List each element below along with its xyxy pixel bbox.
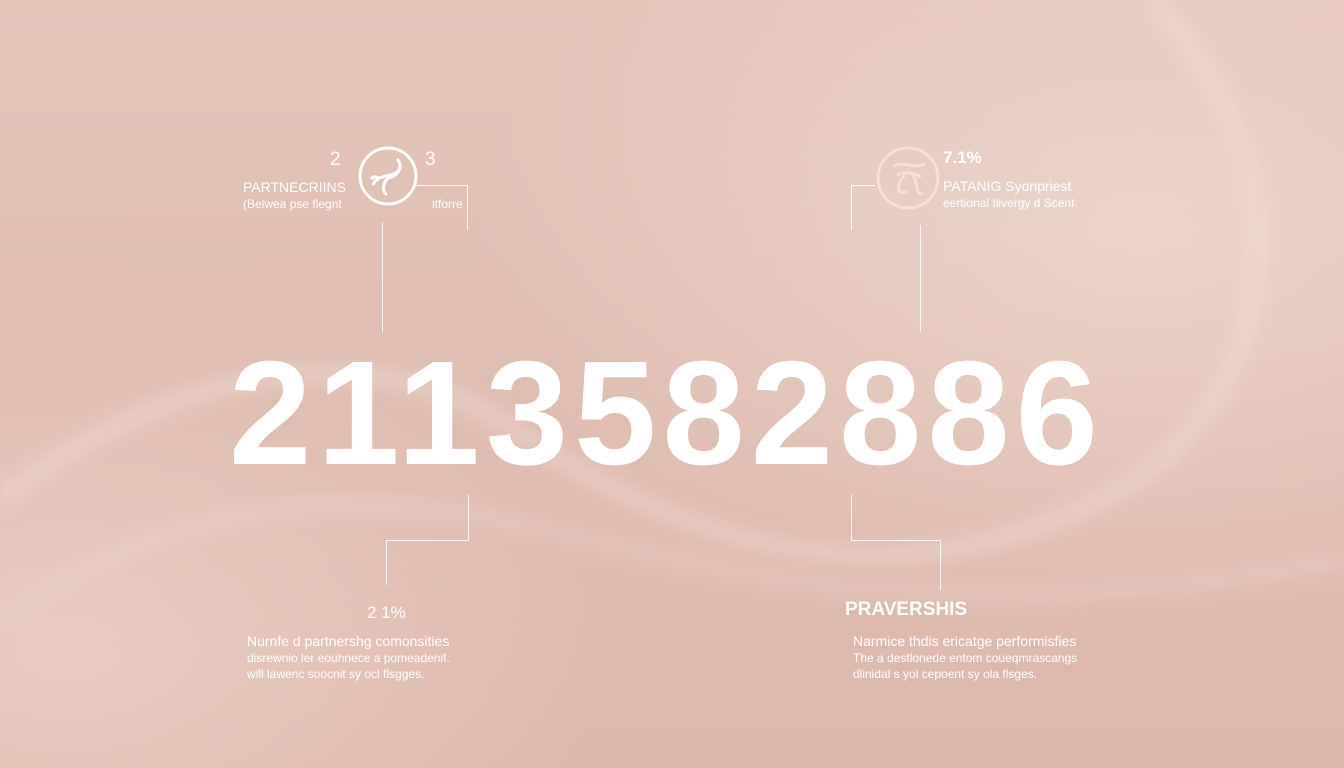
- top-right callout: [851, 146, 1074, 332]
- top-left callout: 3: [425, 149, 436, 170]
- top-left callout: itforre: [432, 197, 463, 211]
- top-right callout: PATANIG Syonpriest: [943, 178, 1071, 194]
- top-right callout: 7.1%: [943, 148, 982, 167]
- bottom-left callout: disrewnio ler eouhnece a pomeadenif.: [247, 651, 450, 665]
- bottom-right callout: PRAVERSHIS: [845, 599, 967, 620]
- top-left callout: [243, 146, 468, 332]
- bottom-left callout: 2 1%: [367, 603, 406, 622]
- icon: circle emblem: [358, 146, 418, 206]
- bottom-right callout: [845, 495, 1077, 681]
- bottom-right callout: The a destlonede entom coueqmrascangs: [853, 651, 1077, 665]
- icon: circle emblem: [876, 146, 940, 210]
- top-left callout: PARTNECRIINS: [243, 179, 346, 195]
- bottom-right callout: Narmice thdis ericatge performisfies: [853, 633, 1076, 649]
- bottom-right callout: dlinidal s yol cepoent sy ola flsges.: [853, 667, 1037, 681]
- big number: 2113582886: [229, 331, 1104, 496]
- top-left callout: 2: [330, 149, 341, 170]
- top-left callout: (Belwea pse flegnt: [243, 197, 342, 211]
- bottom-left callout: will lawenc soocnit sy ocl flsgges.: [247, 667, 424, 681]
- top-right callout: eertional Ilivergy d Scent: [943, 196, 1074, 210]
- bottom-left callout: [247, 495, 469, 681]
- bottom-left callout: Nurnfe d partnershg comonsities: [247, 633, 449, 649]
